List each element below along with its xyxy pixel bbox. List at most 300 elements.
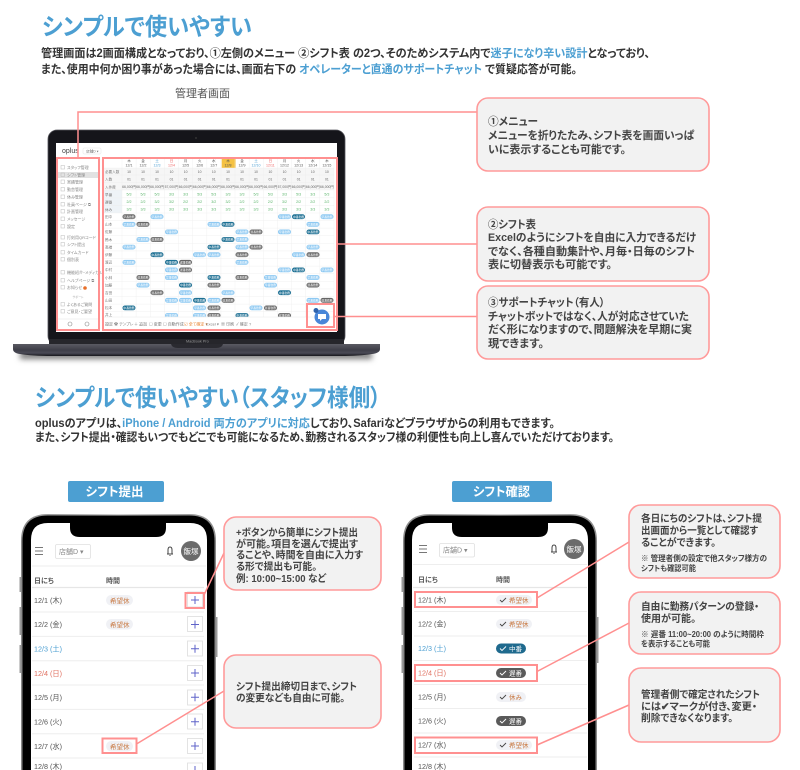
highlight: row 12/7 — [415, 738, 537, 753]
shift pills: 早番勤務 — [180, 291, 191, 295]
shift table: 66,000円 — [122, 185, 136, 189]
date rows: 12/5 (月) — [418, 692, 446, 702]
shift table: 10 — [226, 170, 230, 174]
connector: plus button to callout — [204, 553, 224, 595]
menu icon — [35, 548, 43, 554]
shift table: 12/8 — [224, 164, 232, 168]
connector: row 12/1 to callout — [537, 542, 629, 598]
shift table: 10 — [311, 170, 315, 174]
shift table: 2/2 — [268, 200, 273, 204]
phone notch — [70, 523, 166, 537]
shift pills: 早番勤務 — [307, 222, 319, 226]
shift table: 3/3 — [226, 192, 230, 196]
shift table: 01 — [325, 178, 329, 182]
text block: staff intro: また、シフト提出・確認もいつでもどこでも可能になるため、勤務されるスタッフ様の利便性も向上し喜んでいただけております。 — [35, 430, 614, 444]
date rows: 12/4 (日) — [34, 669, 62, 678]
shift table: 5/3 — [197, 192, 202, 196]
shift table: 10 — [141, 170, 145, 174]
shift table: 12/15 — [322, 164, 331, 168]
shift pills: 早番勤務 — [151, 215, 163, 219]
shift table: 01 — [283, 178, 286, 182]
callout: plus button: 例: 10:00~15:00 など — [236, 572, 327, 585]
table toolbar: ☐ 自動作成 — [163, 320, 184, 326]
table toolbar — [103, 317, 337, 331]
title: admin section heading: シンプルで使いやすい — [42, 14, 252, 41]
phone: shift confirm — [402, 514, 598, 770]
plus buttons — [188, 592, 202, 770]
highlight: plus button — [186, 593, 204, 608]
sidebar menu: 計画管理 — [67, 208, 83, 214]
shift pills: 早番勤務 — [265, 276, 276, 280]
store selector: 店舗D ▾ — [59, 547, 84, 556]
shift table: 66,000円 — [320, 185, 334, 189]
shift pills: 中番勤務 — [307, 230, 319, 234]
laptop screen — [56, 143, 337, 332]
shift table: 01 — [254, 178, 258, 182]
date rows: 12/6 (火) — [418, 716, 446, 726]
shift pills: 中番勤務 — [180, 283, 191, 287]
highlight: shift table area — [103, 158, 337, 330]
shift pills: 早番勤務 — [307, 298, 319, 302]
laptop body — [48, 130, 345, 345]
callout: support chat: 現できます。 — [488, 337, 544, 350]
shift pills: 早番勤務 — [123, 245, 135, 249]
date rows: 12/7 (水) — [34, 742, 62, 751]
shift table: 3/3 — [197, 208, 202, 212]
shift table: 10 — [170, 170, 173, 174]
confirmed shift pills — [496, 595, 532, 750]
callout: shift table: ②シフト表 — [488, 217, 536, 231]
connector: row 12/7 to callout — [537, 705, 629, 745]
shift table: 3/2 — [154, 200, 160, 204]
shift table: 57,000円 — [165, 185, 179, 189]
shift table: 火 — [297, 158, 301, 163]
shift table: 12/14 — [308, 164, 317, 168]
shift table: 水 — [212, 158, 216, 163]
highlight: row 12/1 — [415, 592, 537, 607]
phone notch — [452, 523, 548, 537]
shift table: 山本 — [105, 222, 113, 226]
shift pills: 早番勤務 — [236, 238, 248, 242]
shift table: 01 — [212, 178, 216, 182]
shift table: 10 — [212, 170, 216, 174]
menu icon — [419, 546, 427, 552]
callout: confirm list — [629, 505, 780, 578]
callout: work patterns: ※ 遅番 11:00~20:00 のように時間枠 — [641, 629, 764, 639]
callout: confirmed marks: 管理者側で確定されたシフト — [641, 688, 760, 701]
shift table: 01 — [184, 178, 188, 182]
date rows: 12/4 (日) — [418, 668, 446, 678]
shift table: 田中 — [105, 214, 113, 219]
shift table: 人件費 — [105, 184, 116, 190]
shift table: 人数 — [105, 176, 113, 182]
shift table: 66,000円 — [193, 185, 207, 189]
shift table: 3/3 — [169, 208, 174, 212]
shift table: 木 — [226, 158, 230, 163]
shift pills: 早番勤務 — [123, 215, 135, 219]
bell icon — [551, 545, 557, 554]
table toolbar: ☑ 全て確定 ▾ — [184, 320, 208, 326]
date rows: 12/6 (火) — [34, 718, 62, 726]
callout: work patterns: 自由に勤務パターンの登録・ — [641, 600, 759, 613]
shift table: 66,000円 — [249, 185, 263, 189]
button: shift confirm: シフト確認 — [473, 484, 530, 499]
shift table: 3/3 — [183, 192, 188, 196]
column headers — [34, 576, 120, 585]
header divider — [32, 565, 206, 567]
shift table: 2/2 — [140, 200, 146, 204]
button: shift submit — [68, 481, 164, 502]
connector: pill to callout — [136, 691, 224, 744]
laptop shadow — [20, 352, 372, 359]
callout: menu: ①メニュー — [488, 115, 538, 128]
shift table: 10 — [198, 170, 202, 174]
laptop hinge notch — [171, 344, 223, 348]
callout: deadline: シフト提出締切日まで、シフト — [236, 680, 357, 693]
shift table: 井上 — [105, 312, 113, 317]
request-off pills: 希望休 — [110, 620, 130, 629]
date rows: 12/2 (金) — [418, 620, 446, 628]
callout: plus button — [224, 517, 381, 590]
shift table: 01 — [226, 178, 230, 182]
date rows: 12/3 (土) — [418, 644, 446, 653]
shift pills: 早番勤務 — [279, 230, 290, 234]
sidebar menu: 休み管理 — [67, 194, 83, 200]
sidebar menu: 個別表 — [67, 256, 79, 262]
avatar: 飯塚 — [566, 545, 582, 554]
shift table: 3/3 — [240, 192, 244, 196]
table toolbar: ▦ 印刷 — [221, 320, 234, 326]
shift table: 3/2 — [169, 200, 174, 204]
shift pills: 早番勤務 — [307, 276, 319, 280]
shift table: 早番 — [105, 192, 113, 197]
button: shift submit: シフト提出 — [86, 484, 144, 499]
shift table: 中村 — [105, 267, 113, 272]
shift table: 金 — [141, 158, 145, 163]
callout: shift table: でなく、各種自動集計や、月毎・日毎のシフト — [488, 244, 695, 258]
shift table: 12/10 — [252, 164, 260, 168]
shift table: 01 — [269, 178, 272, 182]
shift pills: 遅番勤務 — [151, 291, 163, 295]
shift table: 01 — [141, 178, 145, 182]
sidebar menu: タイムカード — [67, 249, 89, 255]
shift table: 10 — [127, 170, 131, 174]
table toolbar: ✿ テンプレ — [114, 320, 134, 326]
shift table: 10 — [240, 170, 244, 174]
shift table: 3/3 — [282, 192, 287, 196]
shift table: 3/3 — [282, 208, 287, 212]
table toolbar: ? — [249, 322, 252, 326]
shift table: 3/3 — [126, 208, 132, 212]
shift table: 12/1 — [126, 164, 132, 168]
shift table: 高橋 — [105, 244, 113, 250]
laptop mockup — [13, 130, 380, 359]
callout: menu: メニューを折りたたみ、シフト表を画面いっぱ — [488, 128, 694, 142]
shift table: 小林 — [105, 275, 113, 280]
sidebar menu: ご意見・ご要望 — [67, 308, 92, 314]
text block: admin intro: 管理画面は2画面構成となっており、①左側のメニュー ②シフト表 の2つ、そのためシステム内で迷子になり辛い設計となっており、 — [41, 46, 650, 60]
callout: plus button: が可能。項目を選んで提出す — [236, 538, 358, 550]
store selector — [83, 148, 101, 154]
shift table: 休み — [105, 207, 113, 212]
shift pills: 遅番勤務 — [208, 314, 220, 318]
callout: work patterns: を表示することも可能 — [641, 638, 710, 648]
shift table: 12/9 — [238, 164, 246, 168]
shift table: 3/3 — [310, 208, 315, 212]
laptop camera — [195, 137, 197, 139]
callout: plus button: ることや、時間を自由に入力す — [236, 548, 363, 562]
shift table: 12/2 — [140, 164, 146, 168]
connector: menu to callout — [78, 112, 477, 158]
shift table: 吉田 — [105, 290, 113, 295]
shift table: 12/11 — [266, 164, 275, 168]
text block: admin intro: また、使用中何か困り事があった場合には、画面右下の オペレーターと直通のサポートチャット で質疑応答が可能。 — [41, 62, 577, 76]
avatar: 飯塚 — [184, 547, 199, 556]
table toolbar: ✓ 確定 — [236, 320, 248, 326]
highlight: menu area — [57, 158, 99, 330]
laptop model name: MacBook Pro — [186, 340, 209, 344]
title: staff section heading: シンプルで使いやすい（スタッフ様側） — [35, 385, 381, 412]
shift table: 10 — [155, 170, 159, 174]
shift pills: 早番勤務 — [194, 306, 205, 310]
confirmed shift pills: 遅番 — [509, 716, 522, 726]
shift pills: 遅番勤務 — [236, 276, 248, 280]
shift table: 2/2 — [197, 200, 202, 204]
laptop chin — [49, 339, 344, 344]
sidebar menu — [57, 164, 103, 326]
sidebar menu: 打刻用QRコード — [67, 234, 96, 240]
shift table: 火 — [198, 158, 202, 163]
shift table: 3/3 — [154, 208, 160, 212]
table toolbar: ☐ 変更 — [149, 320, 162, 326]
shift table: 渡辺 — [105, 260, 113, 264]
phone side buttons — [20, 577, 218, 673]
shift table: 3/3 — [183, 208, 188, 212]
shift pills: 中番勤務 — [236, 314, 248, 318]
shift pills: 早番勤務 — [279, 268, 290, 272]
shift table: 日 — [170, 159, 173, 163]
text block: staff intro — [35, 416, 614, 444]
shift table: 3/3 — [211, 208, 216, 212]
shift pills: 中番勤務 — [293, 268, 304, 272]
shift table: 土 — [155, 158, 159, 163]
shift pills: 中番勤務 — [151, 253, 163, 257]
laptop base — [13, 344, 380, 356]
brand logo: oplus — [62, 148, 79, 155]
shift table: 山田 — [105, 298, 113, 302]
shift table: 01 — [198, 178, 202, 182]
callout: confirm list: ※ 管理者側の設定で他スタッフ様方の — [641, 553, 767, 563]
callout: shift table — [477, 207, 709, 281]
sidebar menu: 勤怠管理 — [67, 186, 83, 192]
shift pills: 早番勤務 — [293, 253, 304, 257]
callout: confirmed marks: 削除できなくなります。 — [641, 712, 733, 724]
shift table: 金 — [240, 158, 244, 163]
shift table: 12/6 — [196, 164, 203, 168]
shift table — [104, 158, 334, 318]
phone screen — [31, 523, 207, 770]
column headers: 日にち — [418, 576, 438, 584]
shift table: 5/3 — [154, 192, 160, 196]
shift pills: 中番勤務 — [222, 238, 234, 242]
shift pills: 遅番勤務 — [321, 298, 333, 302]
shift table: 3/3 — [310, 192, 315, 196]
shift pills: 早番勤務 — [123, 222, 135, 226]
shift table: 66,000円 — [207, 185, 221, 189]
shift table: 12/7 — [210, 164, 217, 168]
shift pills: 早番勤務 — [208, 298, 220, 302]
request-off pills: 希望休 — [110, 596, 130, 605]
sidebar menu: 実績管理 — [67, 178, 83, 184]
sidebar menu: ヘルプページ ⧉ — [67, 277, 94, 283]
confirmed shift pills: 遅番 — [509, 668, 522, 678]
column headers: 日にち — [34, 577, 54, 585]
shift table: 5/3 — [254, 192, 258, 196]
confirmed shift pills: 希望休 — [509, 596, 529, 605]
sidebar menu: 社員ページ ⧉ — [67, 201, 91, 207]
phone frame — [403, 514, 597, 770]
callout: deadline — [224, 655, 381, 728]
highlight: support chat — [307, 304, 334, 327]
shift table: 10 — [269, 170, 272, 174]
table toolbar: ＋ 追加 — [134, 320, 147, 326]
shift table: 2/2 — [240, 200, 244, 204]
callout: confirmed marks — [629, 668, 780, 742]
shift table: 66,000円 — [292, 185, 306, 189]
shift pills: 中番勤務 — [279, 291, 290, 295]
callout: menu — [477, 98, 709, 171]
shift table: 01 — [127, 178, 131, 182]
shift pills: 遅番勤務 — [250, 245, 262, 249]
shift pills: 遅番勤務 — [250, 230, 262, 234]
confirmed shift pills: 休み — [509, 693, 522, 702]
shift table: 水 — [311, 158, 315, 163]
shift table: 3/3 — [169, 192, 174, 196]
phone frame — [21, 514, 216, 770]
highlight: row 12/4 — [415, 665, 537, 681]
shift table: 5/3 — [126, 192, 132, 196]
shift table: 12/12 — [280, 164, 289, 168]
column headers: 時間 — [496, 575, 510, 584]
shift table: 01 — [297, 178, 301, 182]
connector: shift table to callout — [337, 243, 477, 245]
shift pills: 早番勤務 — [166, 268, 177, 272]
date rows: 12/7 (水) — [418, 740, 446, 750]
shift table: 10 — [297, 170, 301, 174]
confirmed shift pills: 希望休 — [509, 620, 529, 629]
shift table: 松本 — [105, 305, 113, 310]
shift pills: 遅番勤務 — [279, 314, 290, 318]
shift pills: 早番勤務 — [307, 245, 319, 249]
shift table: 5/3 — [140, 192, 146, 196]
shift table: 必要人数 — [105, 169, 120, 174]
shift table: 5/3 — [268, 192, 273, 196]
shift pills: 中番勤務 — [166, 260, 177, 264]
shift pills: 遅番勤務 — [208, 283, 220, 287]
shift pills: 早番勤務 — [137, 238, 149, 242]
store selector: 店舗D ▾ — [443, 546, 468, 554]
shift pills: 早番勤務 — [123, 260, 135, 264]
shift table: 月 — [283, 158, 286, 163]
shift pills: 早番勤務 — [166, 298, 177, 302]
sidebar menu: スタッフ管理 — [67, 164, 89, 170]
label: admin screen: 管理者画面 — [175, 86, 230, 100]
avatar — [564, 539, 584, 559]
shift pills: 早番勤務 — [265, 283, 276, 287]
shift table: 57,000円 — [278, 185, 292, 189]
shift table: 01 — [311, 178, 315, 182]
shift table: 鈴木 — [105, 237, 113, 242]
shift table: 10 — [325, 170, 329, 174]
shift pills: 早番勤務 — [236, 260, 248, 264]
shift pills: 早番勤務 — [236, 230, 248, 234]
sidebar menu: 機能紹介・メディカル — [67, 269, 103, 275]
store selector: 店舗D ▾ — [86, 148, 99, 154]
shift pills: 遅番勤務 — [307, 253, 319, 257]
shift table: 2/2 — [183, 200, 188, 204]
shift table: 3/3 — [254, 208, 258, 212]
shift table: 3/3 — [240, 208, 244, 212]
shift table: 3/3 — [268, 208, 273, 212]
shift pills: 遅番勤務 — [222, 298, 234, 302]
connector: chat to callout — [334, 316, 477, 318]
shift pills: 中番勤務 — [208, 245, 220, 249]
shift pills: 早番勤務 — [208, 222, 220, 226]
callout: support chat: チャットボットではなく、人が対応させていた — [488, 309, 689, 323]
shift pills: 遅番勤務 — [137, 276, 149, 280]
shift table: 3/2 — [282, 200, 287, 204]
callout: plus button: る形で提出も可能。 — [236, 560, 317, 573]
shift pills: 早番勤務 — [222, 291, 234, 295]
callout: support chat: だく形になりますので、問題解決を早期に実 — [488, 322, 692, 336]
shift table: 66,000円 — [221, 185, 235, 189]
shift pills: 遅番勤務 — [151, 238, 163, 242]
table toolbar: 設定 — [105, 320, 113, 326]
shift pills: 早番勤務 — [208, 253, 220, 257]
table toolbar: Excel ▾ — [206, 322, 219, 326]
text block: admin intro — [41, 46, 650, 76]
shift table: 土 — [254, 158, 258, 163]
request-off pills — [106, 595, 133, 752]
shift pills: 早番勤務 — [321, 268, 333, 272]
shift table: 木 — [127, 158, 131, 163]
date rows: 12/3 (土) — [34, 644, 62, 654]
shift table: 66,000円 — [136, 185, 150, 189]
sidebar menu: お知らせ — [67, 284, 82, 290]
callout: confirm list: ることができます。 — [641, 536, 716, 549]
shift table: 12/5 — [182, 164, 189, 168]
date rows — [414, 596, 587, 770]
column headers: 時間 — [106, 576, 120, 585]
highlight: request-off pill — [102, 738, 136, 753]
shift pills: 遅番勤務 — [180, 268, 191, 272]
callout: confirm list: 各日にちのシフトは、シフト提 — [641, 512, 763, 525]
phone screen — [412, 523, 588, 770]
confirmed shift pills: 希望休 — [509, 741, 529, 750]
shift pills: 早番勤務 — [250, 306, 262, 310]
phone side buttons — [402, 577, 598, 673]
shift table: 3/3 — [140, 208, 146, 212]
shift table: 3/3 — [324, 208, 329, 212]
callout: plus button: +ボタンから簡単にシフト提出 — [236, 526, 358, 539]
callout: shift table: Excelのようにシフトを自由に入力できるだけ — [488, 230, 697, 244]
shift table: 2/2 — [126, 200, 132, 204]
shift table: 66,000円 — [150, 185, 164, 189]
shift pills: 早番勤務 — [194, 314, 205, 318]
shift pills: 中番勤務 — [123, 306, 135, 310]
shift table: 66,000円 — [306, 185, 320, 189]
shift pills: 早番勤務 — [180, 298, 191, 302]
